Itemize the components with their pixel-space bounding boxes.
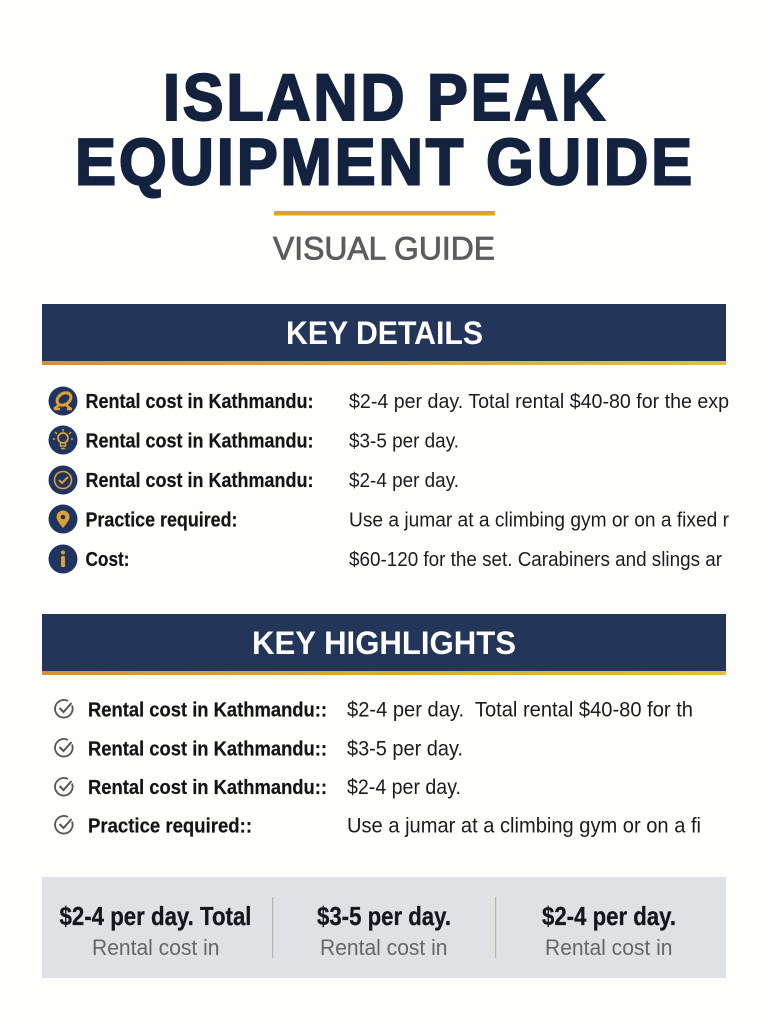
- icon: map pin: [48, 504, 78, 534]
- value: row 1: $2-4 per day. Total rental $40-80 for the exp: [349, 390, 729, 413]
- value: highlight 1: $2-4 per day. Total rental $40-80 for th: [347, 698, 693, 722]
- title: [75, 60, 695, 199]
- icon: check 2: [55, 739, 73, 757]
- label: row 4: Practice required:: [86, 510, 238, 532]
- icon: check 3: [55, 778, 73, 796]
- value: row 4: Use a jumar at a climbing gym or on a fixed r: [349, 508, 729, 532]
- stat 2: Rental cost in: [320, 935, 448, 960]
- label: row 2: Rental cost in Kathmandu:: [86, 430, 314, 452]
- label: highlight 1: Rental cost in Kathmandu::: [88, 700, 327, 722]
- value: row 3: $2-4 per day.: [349, 469, 459, 492]
- label: row 5: Cost:: [86, 549, 130, 571]
- title: ISLAND PEAK: [163, 60, 608, 134]
- icon: light bulb: [48, 426, 78, 454]
- title: EQUIPMENT GUIDE: [75, 125, 695, 199]
- panel: key details rows: [48, 386, 729, 574]
- stat 2: [317, 901, 451, 960]
- value: highlight 3: $2-4 per day.: [347, 775, 461, 799]
- label: row 3: Rental cost in Kathmandu:: [86, 470, 314, 492]
- title accent rule: [274, 211, 495, 216]
- icon: check 4: [55, 816, 73, 834]
- panel: key highlights heading: KEY HIGHLIGHTS: [252, 625, 516, 661]
- label: highlight 3: Rental cost in Kathmandu::: [88, 777, 327, 799]
- stat 3: Rental cost in: [545, 935, 672, 960]
- panel: key highlights rows: [55, 698, 701, 838]
- subtitle: VISUAL GUIDE: [273, 230, 495, 266]
- stat 3: $2-4 per day.: [542, 901, 676, 931]
- icon: badge: [48, 386, 78, 416]
- panel: key highlights heading: [42, 614, 726, 675]
- stat 1: $2-4 per day. Total: [60, 901, 252, 931]
- panel: stats strip: [42, 877, 726, 978]
- stat 1: [60, 901, 252, 960]
- label: row 1: Rental cost in Kathmandu:: [86, 391, 314, 413]
- panel: key details heading: [42, 304, 726, 365]
- value: highlight 2: $3-5 per day.: [347, 736, 463, 760]
- icon: check badge: [48, 466, 78, 494]
- icon: check 1: [55, 700, 73, 718]
- label: highlight 4: Practice required::: [88, 816, 252, 838]
- stat 3: [542, 901, 676, 960]
- panel: key details heading: KEY DETAILS: [286, 315, 483, 351]
- value: row 2: $3-5 per day.: [349, 430, 459, 452]
- icon: info: [48, 544, 78, 574]
- value: row 5: $60-120 for the set. Carabiners and slings ar: [349, 548, 722, 571]
- label: highlight 2: Rental cost in Kathmandu::: [88, 738, 327, 760]
- stat 1: Rental cost in: [92, 935, 220, 960]
- stat 2: $3-5 per day.: [317, 901, 451, 931]
- value: highlight 4: Use a jumar at a climbing gym or on a fi: [347, 814, 701, 838]
